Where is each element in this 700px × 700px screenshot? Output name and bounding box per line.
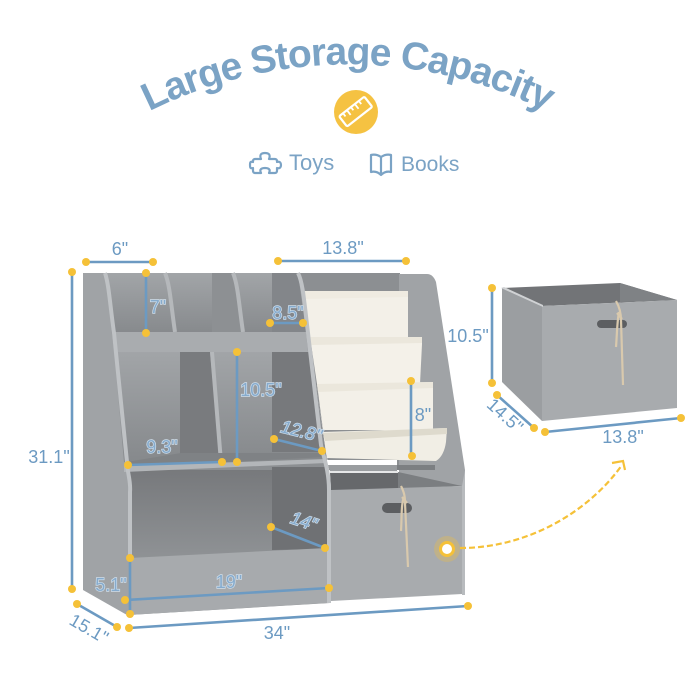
right section back [299,273,400,470]
drawer rope [401,486,408,567]
dimension: 12.8 in [270,416,326,455]
dimension: box 10.5 in: 10.5" [447,326,489,346]
dimension: 5.1 in: 5.1" [95,575,127,595]
sling 3 [317,382,433,430]
dimension: 14 in [267,508,329,552]
sling 2 [310,337,422,384]
icon: open book [371,155,391,175]
icon: ruler badge [334,90,378,134]
dimension: 8 in: 8" [415,405,431,425]
dimension: box 14.5 in: 14.5" [483,394,527,437]
curved dividers [165,273,175,332]
dimension: box 13.8 in: 13.8" [602,427,644,447]
top shelf front [113,332,308,352]
left panel front edge [105,273,130,558]
lower slat [328,465,397,471]
icon: puzzle piece [250,153,281,173]
dimension: 10.5 in middle [233,348,282,466]
bookshelf [83,273,465,615]
dimension: 6 in: 6" [112,239,128,259]
left outer side panel [83,273,130,615]
dimension: 6 in [82,239,157,266]
lower box front [129,548,327,615]
box handle [597,320,627,328]
sling 4 [323,428,447,461]
dimension: 8.5 in: 8.5" [272,303,304,323]
middle shelf floor [126,453,326,467]
lower compartment back [128,470,327,558]
dimension: 5.1 in [95,554,134,618]
title: Large Storage Capacity [140,42,556,112]
dimension: box 10.5 in [447,284,496,387]
dimension: 8.5 in [266,303,307,327]
dimension: 13.8 in top: 13.8" [322,238,364,258]
middle compartments back [114,351,324,462]
dark interior above drawer [330,473,398,490]
dimension: 19 in: 19" [216,572,242,592]
dimension: 13.8 in top [274,238,410,265]
middle shelf front [124,459,326,472]
box rope [616,301,623,385]
dimension: 9.3 in [124,437,226,469]
dimension: 7 in [142,269,166,337]
dimension: 19 in [121,572,333,604]
legend: toys: Toys [289,150,334,175]
middle slanted divider [212,352,221,462]
dimension: 15.1 in [66,600,121,648]
dimension: 14 in: 14" [288,508,321,535]
centre divider [298,273,329,603]
dimension: 8 in [407,377,431,460]
cabinet underlay [104,273,330,615]
dimension: 31.1 in [28,268,76,593]
storage box [501,283,677,421]
dimension: box 13.8 in [541,414,685,447]
legend: books: Books [401,153,459,176]
right side panel [399,274,465,486]
dimension: 34 in [125,602,472,643]
upper compartments back [106,273,307,335]
dimension: 34 in: 34" [264,623,290,643]
legend: toys [250,150,334,175]
storage drawer [331,486,462,601]
dimension: 10.5 in middle: 10.5" [240,380,282,400]
sling 1 [303,291,408,338]
white gap below slings [327,460,397,465]
dimension: 9.3 in: 9.3" [146,437,178,457]
dimension: 12.8 in: 12.8" [279,416,326,446]
dimension: 7 in: 7" [150,297,166,317]
dimension: 15.1 in: 15.1" [66,610,112,648]
hotspot marker [434,536,460,562]
dimension: 31.1 in: 31.1" [28,447,70,467]
legend: books [371,153,459,176]
arrow: drawer to box [460,461,625,548]
